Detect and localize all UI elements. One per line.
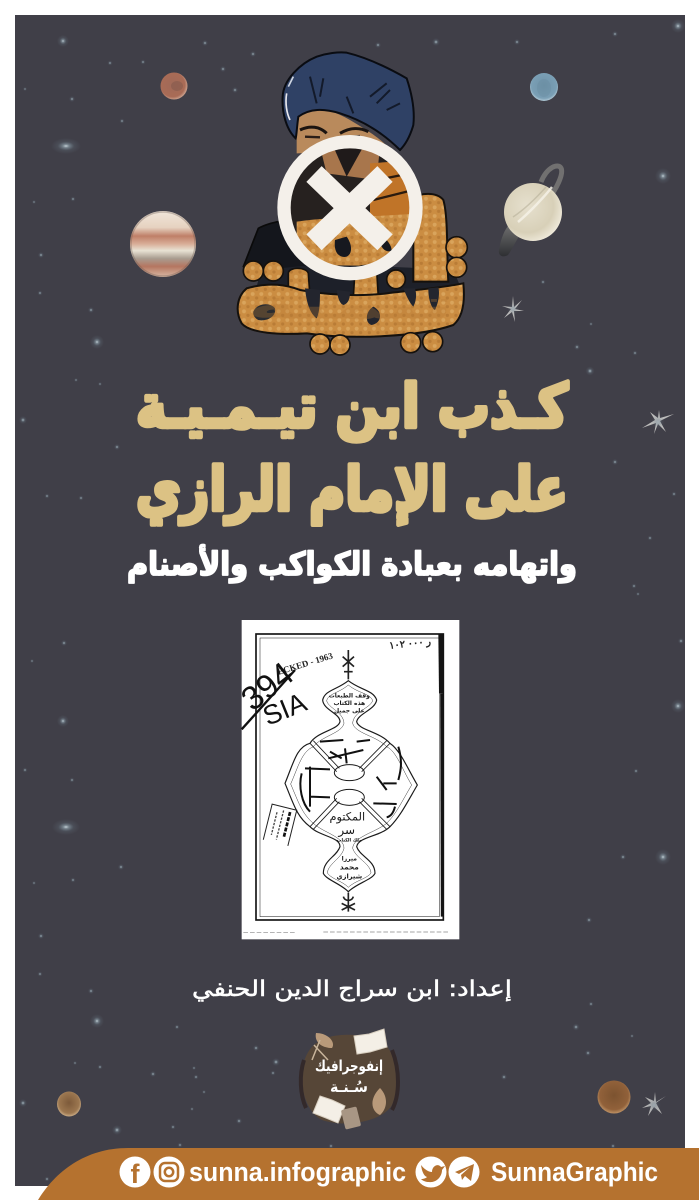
checked stamp: ECKED - 1963: [276, 650, 334, 677]
series badge: [301, 1029, 398, 1130]
portrait turban: [283, 52, 414, 150]
planet: banded Jupiter: [130, 211, 196, 277]
handwritten catalogue mark: SIA: [258, 686, 311, 732]
planet: small red: [160, 72, 188, 100]
cover Arabic captions: وقف الطبعات: [329, 692, 370, 699]
badge small book: [341, 1106, 361, 1130]
cover Arabic captions: [329, 692, 370, 880]
cover Arabic captions: شيرازي: [337, 872, 362, 880]
portrait inner details seen through ring: [290, 148, 410, 266]
scan specks: [243, 931, 450, 934]
planet: small blue: [530, 73, 558, 101]
cover Arabic captions: هذه الكتاب: [333, 700, 365, 707]
portrait face: [297, 108, 390, 153]
top and bottom finials: [342, 650, 355, 912]
icon: twitter: [416, 1156, 446, 1188]
handle: SunnaGraphic: SunnaGraphic: [491, 1157, 658, 1187]
cover Arabic captions: سر: [337, 823, 355, 838]
ornamental medallion: [285, 681, 417, 892]
bright sparkle stars: [502, 296, 674, 1116]
icon: facebook: [120, 1156, 150, 1189]
badge dark blob: [302, 1035, 397, 1124]
badge title: إنفوجرافيك: [315, 1057, 383, 1075]
title line 2: على الإمام الرازي: [136, 455, 568, 525]
cover Arabic captions: على جميل: [334, 708, 365, 715]
footer banner: [38, 1148, 699, 1200]
icon: telegram: [448, 1156, 480, 1188]
logo: stylised name lettering: تيمية: [247, 282, 453, 328]
author credit: إعداد: ابن سراج الدين الحنفي: [192, 977, 512, 1002]
handwritten catalogue mark: 394: [235, 655, 301, 718]
cover Arabic captions: ملك الكتاب: [337, 837, 362, 843]
logo: stylised name lettering: [238, 194, 467, 355]
planet: bottom left: [57, 1092, 81, 1116]
library label: [263, 804, 297, 846]
cover Arabic captions: ميرزا: [342, 856, 357, 863]
medallion calligraphy strokes: [300, 740, 401, 817]
handle: sunna.infographic: sunna.infographic: [189, 1157, 406, 1187]
planet: ringed Saturn: [499, 166, 562, 256]
badge top book: [354, 1029, 387, 1054]
cover double frame: [256, 634, 443, 920]
top handwritten number: ۱۰۲ ر ۰۰۰: [389, 636, 432, 652]
portrait of scholar with logo: [238, 52, 467, 355]
crossed-out symbol: [284, 142, 416, 274]
cover page: [242, 620, 459, 939]
badge leaves: [316, 1033, 386, 1115]
icon: instagram: [154, 1156, 184, 1188]
title line 1: كـذب ابن تيـمـيـة: [136, 372, 568, 442]
subtitle: واتهامه بعبادة الكواكب والأصنام: [127, 544, 577, 583]
portrait shoulders: [243, 217, 320, 280]
icon: facebook: f: [130, 1159, 140, 1189]
badge subtitle: سُـنـة: [330, 1078, 368, 1096]
scanned book cover: [235, 620, 459, 939]
planet: bottom right: [598, 1080, 630, 1114]
cover Arabic captions: محمد: [340, 862, 359, 871]
cover Arabic captions: المكتوم: [329, 810, 365, 825]
badge bottom book: [313, 1096, 345, 1123]
